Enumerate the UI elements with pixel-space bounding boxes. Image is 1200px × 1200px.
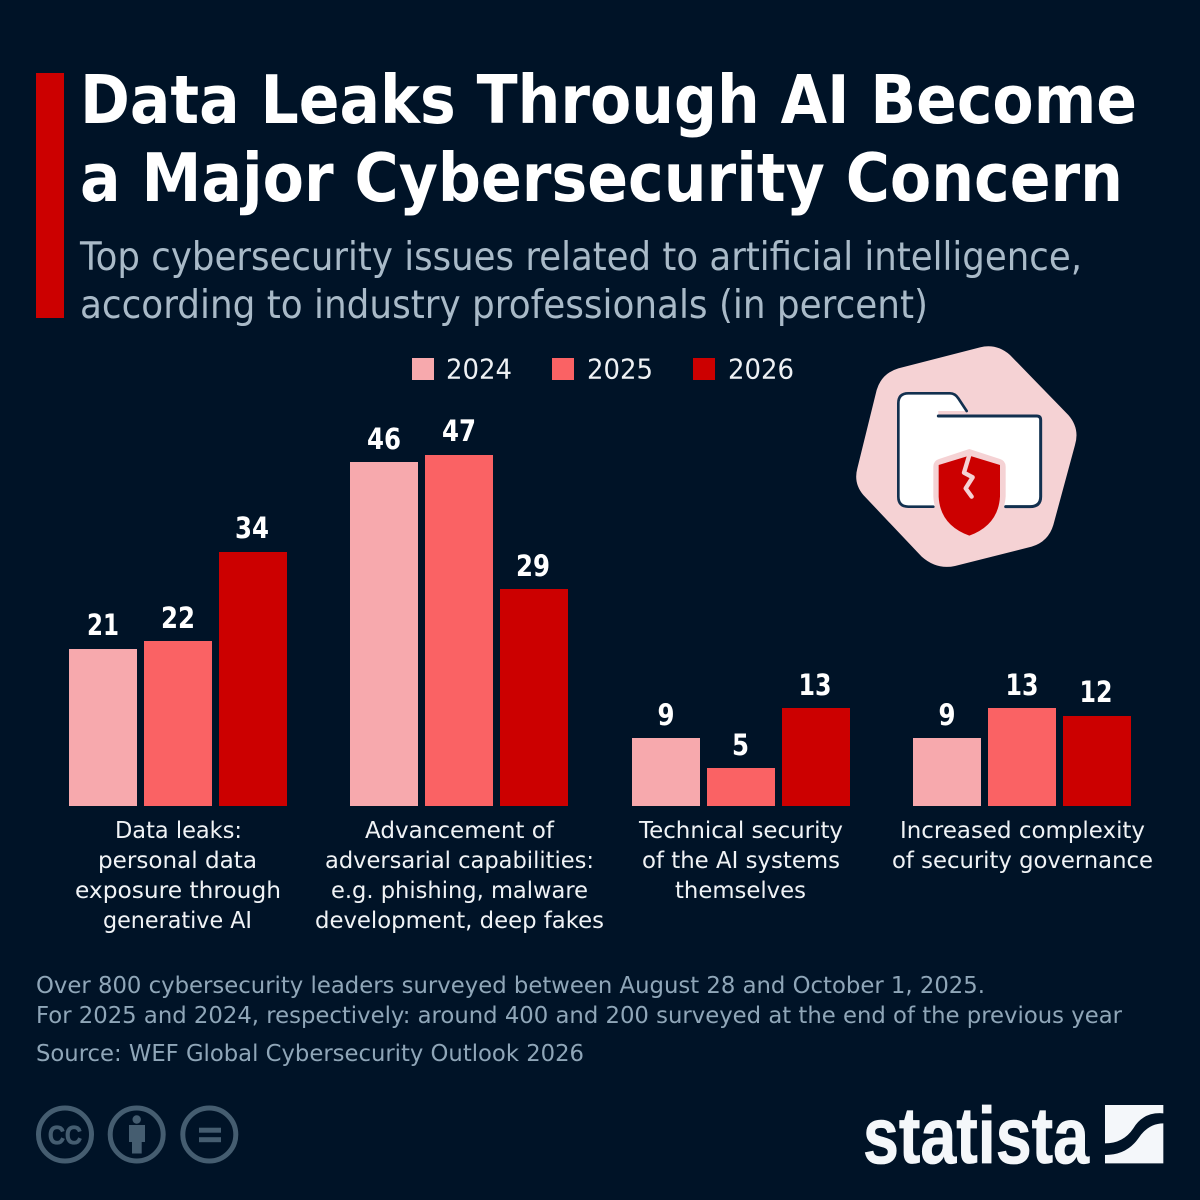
footnote: Over 800 cybersecurity leaders surveyed between August 28 and October 1, 2025.: [36, 971, 985, 999]
subtitle: Top cybersecurity issues related to artificial intelligence,: [79, 234, 1082, 280]
category label: data leaks: exposure through: [75, 876, 281, 904]
category label: technical security: Technical security: [638, 816, 843, 844]
category label: data leaks: generative AI: [103, 906, 252, 934]
bar group: governance complexity: 13: [1006, 668, 1038, 702]
legend: 2026: [728, 352, 794, 386]
bar group: adversarial capabilities: 46: [367, 422, 401, 456]
accent bar: [36, 73, 64, 318]
footnote: For 2025 and 2024, respectively: around 400 and 200 surveyed at the end of the previous year: [36, 1001, 1122, 1029]
bar group: data leaks: 21: [87, 608, 119, 642]
category label: governance complexity: [892, 816, 1153, 874]
category label: adversarial capabilities: [315, 816, 604, 934]
bar group: governance complexity: [913, 668, 1131, 806]
bar group: data leaks: [69, 511, 287, 806]
category label: governance complexity: Increased complexity: [900, 816, 1145, 844]
bar group: technical security: [632, 668, 850, 806]
subtitle: [79, 234, 1082, 328]
bar group: technical security: 9: [658, 698, 674, 732]
category label: adversarial capabilities: adversarial capabilities:: [325, 846, 594, 874]
category label: adversarial capabilities: Advancement of: [365, 816, 555, 844]
bar group: data leaks: 34: [235, 511, 269, 545]
bar group: adversarial capabilities: [350, 414, 568, 806]
category label: technical security: of the AI systems: [642, 846, 840, 874]
icon: folder with cracked shield: [856, 346, 1076, 567]
icon: creative commons: [38, 1108, 92, 1161]
bar group: governance complexity: 12: [1080, 675, 1112, 709]
bar group: adversarial capabilities: 47: [442, 414, 476, 448]
category label: data leaks: [75, 816, 281, 934]
subtitle: according to industry professionals (in percent): [80, 282, 928, 328]
category label: adversarial capabilities: development, deep fakes: [315, 906, 604, 934]
bar group: technical security: 13: [798, 668, 832, 702]
title: [80, 61, 1137, 217]
category label: adversarial capabilities: e.g. phishing, malware: [331, 876, 588, 904]
category label: data leaks: Data leaks:: [115, 816, 242, 844]
bar group: governance complexity: 9: [938, 698, 956, 732]
category label: technical security: themselves: [675, 876, 806, 904]
category label: data leaks: personal data: [98, 846, 257, 874]
category label: governance complexity: of security governance: [892, 846, 1153, 874]
bar group: data leaks: 22: [161, 601, 195, 635]
bar chart: [69, 414, 1131, 806]
bar group: adversarial capabilities: 29: [516, 549, 550, 583]
category label: technical security: [638, 816, 843, 904]
footnote: [36, 971, 1122, 1029]
icon: attribution: [110, 1108, 163, 1161]
bar group: technical security: 5: [732, 728, 749, 762]
icon: no derivatives: [183, 1108, 236, 1161]
statista logo: statista: [863, 1091, 1089, 1180]
legend: [412, 352, 794, 386]
legend: 2024: [446, 352, 512, 386]
legend: 2025: [587, 352, 653, 386]
source: Source: WEF Global Cybersecurity Outlook 2026: [36, 1039, 584, 1067]
icon: creative commons: CC: [48, 1120, 82, 1150]
